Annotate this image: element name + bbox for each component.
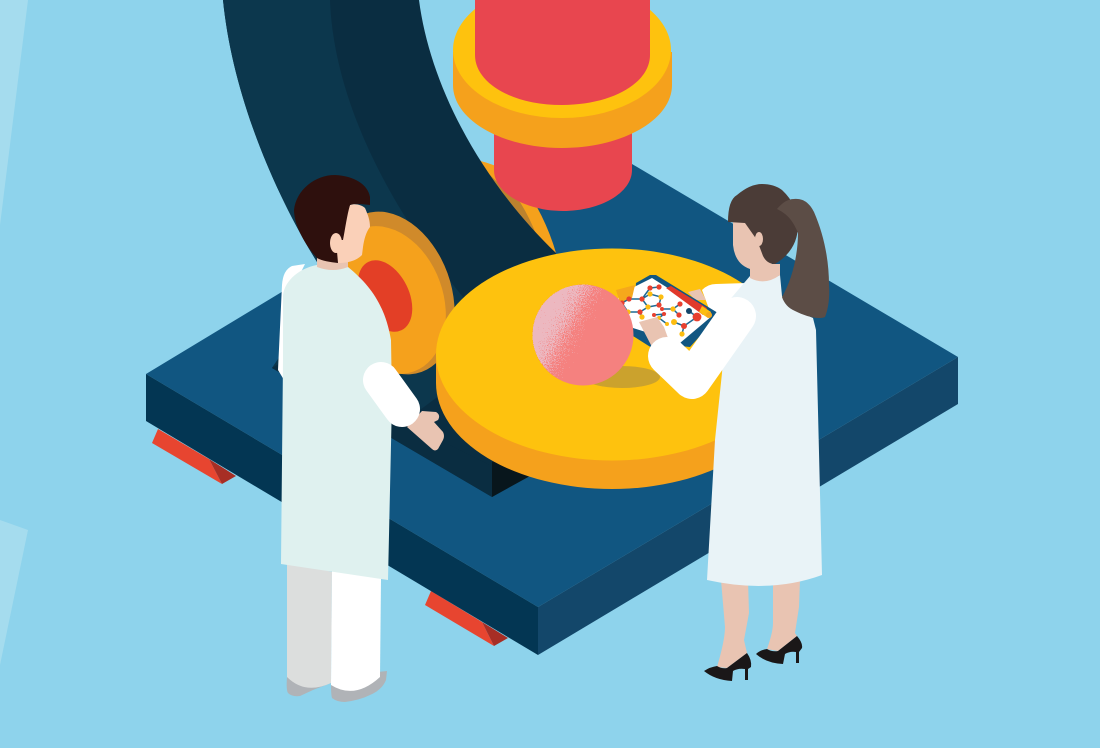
- microscope arm: [223, 0, 556, 497]
- woman hair: [728, 184, 798, 264]
- man neck: [317, 258, 348, 270]
- left orange lens disc: [310, 194, 476, 392]
- woman forearm sleeve: [667, 316, 737, 380]
- man scientist: [278, 175, 444, 702]
- man trousers: [287, 560, 381, 691]
- microscope stage feet: [152, 429, 508, 646]
- microscope stage platform: [146, 164, 958, 655]
- man sleeve: [381, 380, 402, 409]
- woman high heels: [704, 636, 802, 681]
- clipboard with molecule diagram: [616, 275, 718, 348]
- pink sphere specimen: [532, 284, 634, 386]
- woman far hand holding clipboard: [688, 289, 706, 300]
- woman scientist: [639, 184, 829, 681]
- man back arm: [278, 264, 305, 380]
- rear orange disc behind arm: [477, 160, 556, 253]
- woman legs: [717, 580, 800, 668]
- molecule diagram: [619, 284, 701, 337]
- man shoes: [287, 671, 387, 702]
- microscope objective lens: [453, 0, 672, 211]
- woman neck and face: [733, 220, 780, 281]
- woman lab coat: [707, 275, 822, 586]
- woman hand on clipboard: [639, 317, 668, 347]
- man face: [335, 204, 370, 263]
- light beam lower left: [0, 520, 28, 665]
- yellow stage disc: [436, 248, 788, 489]
- woman ear: [755, 232, 763, 246]
- man ear: [330, 233, 342, 253]
- pencil: [666, 286, 712, 318]
- man lab coat: [281, 265, 392, 580]
- man hair: [294, 175, 370, 263]
- man hand: [407, 411, 444, 450]
- woman upper sleeve behind clipboard: [702, 283, 747, 325]
- woman ponytail: [777, 199, 829, 318]
- sphere shadow: [584, 366, 660, 388]
- light beam top left: [0, 0, 28, 225]
